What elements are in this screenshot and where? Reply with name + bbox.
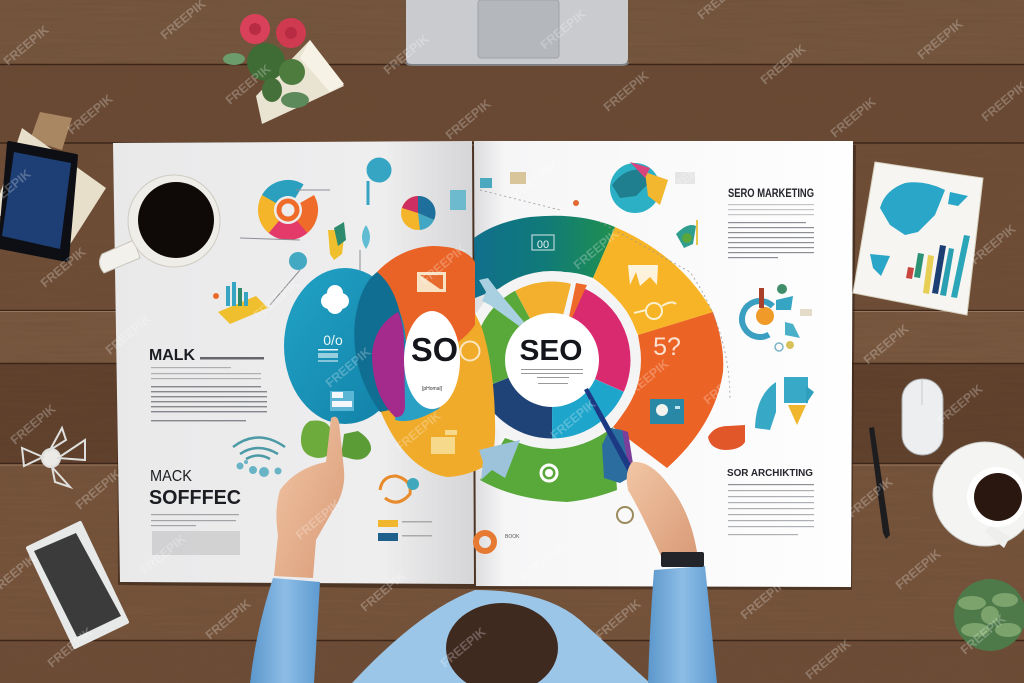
laptop <box>406 0 628 65</box>
watermarks: FREEPIK <box>915 17 965 62</box>
right page: gear infographic <box>735 284 812 351</box>
watermarks: FREEPIK <box>701 362 751 407</box>
icon: arrow top left <box>479 278 524 326</box>
watermarks: FREEPIK <box>538 7 588 52</box>
icon: envelope <box>417 272 446 292</box>
watermarks: FREEPIK <box>893 547 943 592</box>
right page: top icons <box>480 162 730 400</box>
watermarks: FREEPIK <box>65 92 115 137</box>
icon: green teal flag <box>676 220 698 248</box>
icon: percent label <box>318 332 343 362</box>
left page text: MACK SOFFFEC block <box>149 468 241 555</box>
left sleeve <box>250 578 320 683</box>
icon: arrow bottom left <box>479 440 520 480</box>
dark overlap <box>354 272 405 412</box>
watermarks: FREEPIK <box>968 222 1018 267</box>
watermarks: FREEPIK <box>138 532 188 577</box>
watermarks: FREEPIK <box>861 322 911 367</box>
icon: bar chart on document <box>213 282 268 324</box>
watermarks: FREEPIK <box>845 475 895 520</box>
heading: MACK: MACK <box>150 468 193 485</box>
watermarks: FREEPIK <box>593 597 643 642</box>
potted flowers <box>223 14 344 124</box>
left desk items: notebook and tablet <box>0 112 106 260</box>
watermarks: FREEPIK <box>418 242 468 287</box>
watermarks: FREEPIK <box>1 23 51 68</box>
watermarks: FREEPIK <box>803 637 853 682</box>
watermarks: FREEPIK <box>601 69 651 114</box>
text: 5?: 5? <box>653 333 681 361</box>
watermarks: FREEPIK <box>251 277 301 322</box>
watermarks: FREEPIK <box>738 577 788 622</box>
outer ring: teal segment <box>474 216 615 298</box>
watermarks: FREEPIK <box>223 62 273 107</box>
icon: key on yellow <box>634 302 676 319</box>
watermarks: FREEPIK <box>358 569 408 614</box>
watch band <box>661 552 704 567</box>
inner ring segments <box>481 282 630 438</box>
watermarks: FREEPIK <box>103 312 153 357</box>
watermarks: FREEPIK <box>665 152 715 197</box>
watermarks: FREEPIK <box>438 625 488 670</box>
watermarks: FREEPIK <box>45 625 95 670</box>
orange blob <box>377 246 475 390</box>
watermarks: FREEPIK <box>443 97 493 142</box>
coffee cup right with saucer <box>933 442 1024 548</box>
icon: pie chart <box>401 196 435 230</box>
watermarks: FREEPIK <box>38 245 88 290</box>
left page text: MALK block <box>149 347 267 421</box>
icon: colour wheel <box>257 179 319 241</box>
watermarks: FREEPIK <box>511 157 561 202</box>
outer ring: green segment <box>480 427 617 502</box>
watermarks: FREEPIK <box>293 497 343 542</box>
icon: ring key <box>460 342 480 360</box>
icon: percent label: 0/o <box>323 332 343 348</box>
person: shoulders, arms and head <box>250 417 717 683</box>
icon: ring on green <box>541 465 557 481</box>
orange cloud label <box>708 425 745 450</box>
head <box>446 603 558 683</box>
coffee cup top left <box>99 175 220 273</box>
icon: pins and small marks <box>368 159 390 205</box>
icon: label frame on teal: 00 <box>537 239 549 251</box>
outer ring: yellow segment <box>593 227 713 335</box>
computer mouse <box>902 379 943 455</box>
left page <box>113 141 474 584</box>
heading: SOFFFEC: SOFFFEC <box>149 486 241 509</box>
torso <box>352 590 650 683</box>
watermarks: FREEPIK <box>935 382 985 427</box>
left hand <box>274 417 344 578</box>
right hand <box>627 462 697 556</box>
icon: window card <box>330 391 354 411</box>
watermarks: FREEPIK <box>758 42 808 87</box>
outer ring: orange segment <box>613 312 723 468</box>
left page: small infographic icons <box>213 159 466 324</box>
watermarks: FREEPIK <box>393 409 443 454</box>
inner ring backing <box>463 271 641 449</box>
right page heading: SERO MARKETING: SERO MARKETING <box>728 188 814 200</box>
icon: document <box>431 430 457 454</box>
watermarks: FREEPIK <box>8 402 58 447</box>
yellow blob <box>380 305 495 477</box>
icon: city block on yellow <box>628 265 658 286</box>
succulent plant <box>954 579 1024 651</box>
pencil <box>869 427 890 539</box>
watermarks: FREEPIK <box>73 467 123 512</box>
white centre with SEO: SEO <box>520 335 582 367</box>
watermarks: FREEPIK <box>958 612 1008 657</box>
watermarks: FREEPIK <box>621 357 671 402</box>
watermarks: FREEPIK <box>571 227 621 272</box>
blue circle <box>284 268 406 424</box>
white oval with SO: [pHomal] <box>422 386 443 392</box>
white centre with SEO <box>505 313 599 407</box>
right page text: SOR ARCHIKTING: SOR ARCHIKTING <box>727 468 813 479</box>
heading: MALK: MALK <box>149 347 196 364</box>
small left-bottom page icons <box>378 476 633 551</box>
watermarks: FREEPIK <box>548 397 598 442</box>
right page <box>474 141 853 587</box>
right page: card and arch icon <box>755 377 814 430</box>
icon: wifi cloud <box>233 438 285 477</box>
icon: small marks <box>480 172 695 206</box>
white oval with SO: SO <box>411 331 458 368</box>
watermarks: FREEPIK <box>518 539 568 584</box>
purple lens <box>372 312 405 417</box>
small left-bottom page icons: BOOK <box>505 534 520 540</box>
right page text: SOR ARCHIKTING <box>727 468 814 535</box>
right page heading: SERO MARKETING <box>728 188 814 258</box>
right sleeve <box>648 566 717 683</box>
watermarks: FREEPIK <box>323 345 373 390</box>
icon: screen card <box>650 399 684 424</box>
pen and blue block <box>584 388 634 483</box>
left overlapping blob diagram <box>284 246 495 477</box>
watermarks: FREEPIK <box>828 95 878 140</box>
green blobs under circle <box>301 420 371 460</box>
icon: cloud <box>321 285 349 314</box>
map card on desk <box>853 162 983 315</box>
watermarks: FREEPIK <box>381 32 431 77</box>
open magazine <box>113 141 856 590</box>
small desk fan <box>22 428 85 487</box>
central SEO wheel <box>463 216 723 502</box>
icon: label frame on teal <box>532 235 554 251</box>
white oval with SO <box>404 311 460 409</box>
icon: globe <box>610 162 668 213</box>
orange sliver <box>569 283 587 318</box>
smartphone <box>28 523 127 647</box>
watermarks: FREEPIK <box>203 597 253 642</box>
